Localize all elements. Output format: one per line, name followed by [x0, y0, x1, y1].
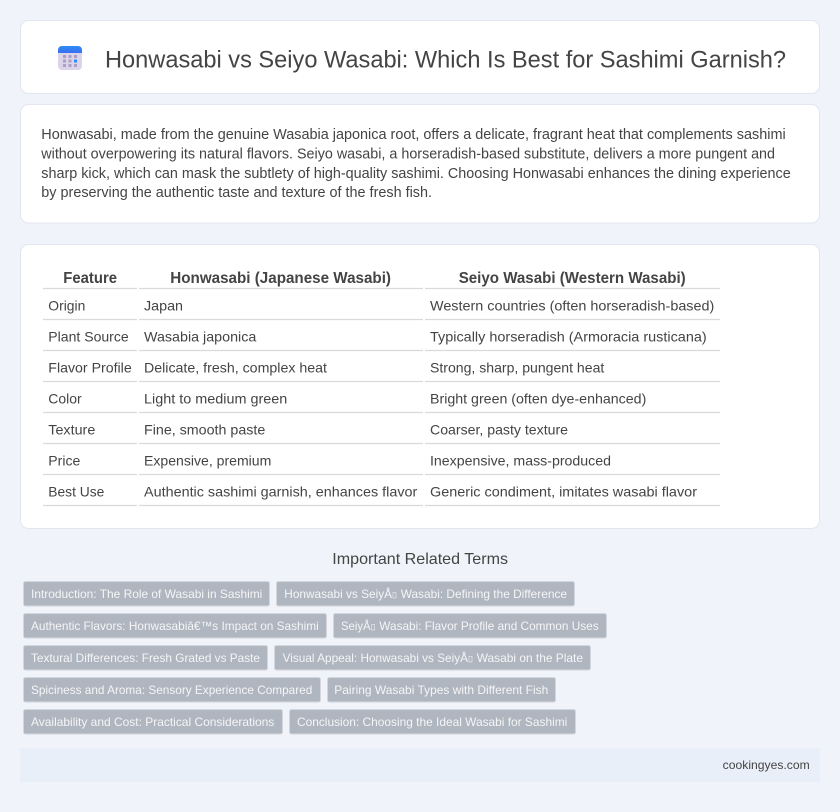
tag: pairing: Pairing Wasabi Types with Different Fish [334, 683, 548, 697]
table row: texture: Texture [48, 422, 96, 438]
table row: texture: Coarser, pasty texture [430, 422, 568, 438]
table row: best use: Best Use [48, 484, 104, 500]
footer source text: cookingyes.com [723, 758, 810, 772]
table row: color: Bright green (often dye-enhanced) [430, 390, 646, 406]
table row: price: Expensive, premium [144, 452, 271, 468]
tag: authentic flavors [24, 614, 326, 638]
table row: best use: Generic condiment, imitates wasabi flavor [430, 484, 697, 500]
table row: color: Color [48, 390, 82, 406]
tag: defining the difference [276, 582, 574, 606]
tag: visual appeal: Visual Appeal: Honwasabi vs SeiyÅ [283, 650, 468, 665]
tag: introduction [24, 582, 270, 606]
table header row: Feature [63, 270, 117, 287]
tag: defining the difference: Wasabi: Defining the Difference [401, 587, 567, 601]
table row: plant source: Wasabia japonica [144, 328, 257, 344]
tag: textural differences: Textural Differences: Fresh Grated vs Paste [31, 651, 260, 665]
footer [20, 748, 820, 782]
table row: best use [43, 484, 720, 506]
tag: introduction: Introduction: The Role of Wasabi in Sashimi [31, 587, 262, 601]
panel: introduction paragraph [20, 104, 820, 223]
tag: authentic flavors: Authentic Flavors: Honwasabiâ€™s Impact on Sashimi [31, 619, 319, 633]
table row: origin: Japan [144, 298, 183, 314]
table header row [43, 270, 720, 288]
tag: availability and cost [24, 710, 282, 734]
table row: plant source: Plant Source [48, 328, 129, 344]
tag: pairing [328, 678, 556, 702]
text block: introduction [40, 127, 791, 201]
table row: price: Price [48, 452, 81, 468]
text block: introduction: Honwasabi, made from the genuine Wasabia japonica root, offers a delicate, fragrant heat that complements sashimi [41, 127, 786, 143]
table row: flavor profile: Flavor Profile [48, 360, 132, 376]
table row: flavor profile: Strong, sharp, pungent heat [430, 360, 604, 376]
title: Honwasabi vs Seiyo Wasabi: Which Is Best for Sashimi Garnish? [105, 46, 786, 74]
table row: origin [43, 298, 720, 320]
table row: origin: Origin [48, 298, 85, 314]
text block: introduction: without overpowering its natural flavors. Seiyo wasabi, a horseradish-based substitute, delivers a more pungent and [40, 146, 775, 162]
table row: texture: Fine, smooth paste [144, 422, 266, 438]
table row: plant source: Typically horseradish (Armoracia rusticana) [430, 328, 707, 344]
panel: title header [20, 20, 820, 94]
panel: comparison table [20, 244, 820, 528]
related terms tags [24, 582, 606, 734]
table row: flavor profile [43, 360, 720, 382]
tag: visual appeal [274, 646, 590, 670]
text block: introduction: by preserving the authentic taste and texture of the fresh fish. [41, 185, 432, 201]
heading: important related terms: Important Related Terms [332, 551, 508, 568]
table row: best use: Authentic sashimi garnish, enhances flavor [144, 484, 418, 500]
tag: availability and cost: Availability and Cost: Practical Considerations [31, 715, 274, 729]
tag: spiciness and aroma [24, 678, 320, 702]
tag: flavor profile and uses: SeiyÅ [341, 618, 371, 633]
tag: conclusion [290, 710, 576, 734]
icon: calendar [58, 46, 82, 70]
tag: defining the difference: Honwasabi vs SeiyÅ [284, 586, 392, 601]
table row: plant source [43, 328, 720, 350]
tag: textural differences [24, 646, 268, 670]
table row: price [43, 452, 720, 474]
tag: conclusion: Conclusion: Choosing the Ideal Wasabi for Sashimi [297, 715, 567, 729]
text block: introduction: sharp kick, which can mask the subtlety of high-quality sashimi. Choosing Honwasabi enhances the dining experience [41, 166, 791, 182]
table row: color [43, 390, 720, 412]
tag: flavor profile and uses: Wasabi: Flavor Profile and Common Uses [379, 619, 599, 633]
table row: flavor profile: Delicate, fresh, complex heat [144, 360, 327, 376]
table header row: Seiyo Wasabi (Western Wasabi) [459, 270, 686, 287]
tag: spiciness and aroma: Spiciness and Aroma: Sensory Experience Compared [31, 683, 312, 697]
table header row: Honwasabi (Japanese Wasabi) [170, 270, 391, 287]
table row: color: Light to medium green [144, 390, 287, 406]
tag: flavor profile and uses [334, 614, 606, 638]
tag: visual appeal: Wasabi on the Plate [477, 651, 583, 665]
table row: price: Inexpensive, mass-produced [430, 452, 611, 468]
table row: texture [43, 422, 720, 444]
table row: origin: Western countries (often horseradish-based) [430, 298, 714, 314]
